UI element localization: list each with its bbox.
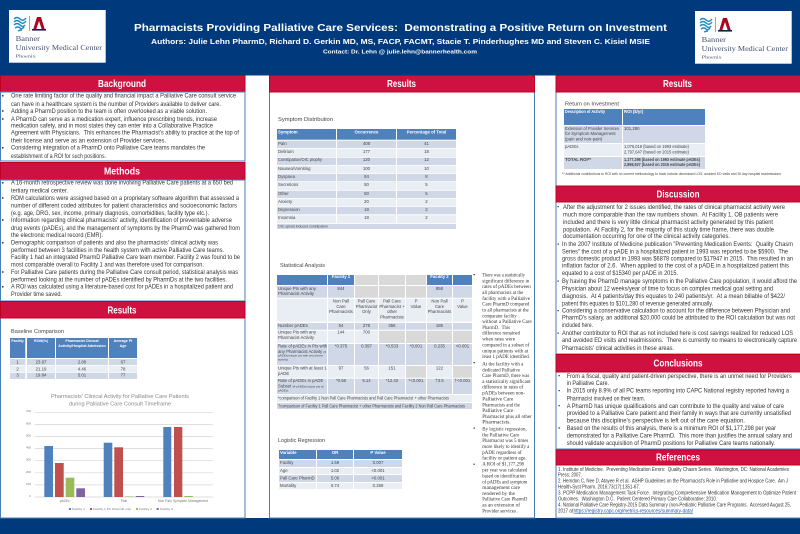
table: statistical analysis: 151 xyxy=(388,366,396,370)
text block: statistical findings: facility with a Palliative xyxy=(482,295,531,302)
logo: Banner University Medical Center right: Banner xyxy=(702,36,727,44)
text block: statistical findings: PharmD. This xyxy=(482,325,510,331)
panel: references xyxy=(556,450,800,518)
table: logistic regression: Mortality xyxy=(280,483,297,488)
panel: methods: Methods xyxy=(104,166,140,178)
panel: background: can have in a healthcare system is the number of Providers available to deliver care. xyxy=(11,102,221,108)
table: return on investment: 1,177,298 (based on 1993 estimate pADEs) xyxy=(624,157,700,162)
panel: discussion: much more comparable than the raw numbers shown. At Facility 1, OB patients were xyxy=(563,212,779,218)
table: logistic regression: P Value xyxy=(370,450,386,455)
table: baseline comparison: 4.46 xyxy=(78,366,87,371)
table: symptom distribution: Secretions xyxy=(278,182,298,187)
table: statistical analysis: activity) xyxy=(278,358,288,362)
table: return on investment: 2,797,647 (based on 2015 estimate) xyxy=(624,149,690,154)
table: logistic regression: Variable xyxy=(280,450,297,455)
table: symptom distribution: 50 xyxy=(364,191,369,196)
table: symptom distribution: 5 xyxy=(425,182,428,187)
panel: discussion: After the adjustment for 2 issues identified, the rates of clinical pharmacist activity were xyxy=(563,205,786,211)
panel: references: References xyxy=(656,452,700,464)
bar chart: pharmacists' clinical activity: Non Pain Symptom Management xyxy=(158,499,208,503)
table: statistical analysis: Value xyxy=(457,304,468,309)
table: return on investment: Description of Activity xyxy=(565,109,606,114)
table: symptom distribution: 408 xyxy=(363,141,371,146)
table: symptom distribution: Delirium xyxy=(278,149,294,154)
table: symptom distribution: 18 xyxy=(424,149,429,154)
table: statistical analysis: †comparison of Facility 1 Pall Care Pharmacist + other Pharmacists and Facility 2 Non Pall Care Pharmacists xyxy=(278,404,465,408)
table: statistical analysis: 0.235 xyxy=(434,344,445,348)
panel: results left: Results xyxy=(108,306,137,316)
text block: statistical findings: of pADEs and symptom xyxy=(482,478,528,485)
bar chart: pharmacists' clinical activity: Facility 1 PC PharmD only xyxy=(93,507,132,511)
table: return on investment: pADEs xyxy=(565,144,578,149)
panel: methods: (e.g. age, DRG, sex, income, primary diagnosis, comorbidities, facility type etc.). xyxy=(11,211,209,217)
panel: conclusions: demonstrated for a Palliative Care PharmD. This more than justifies the annual salary and xyxy=(567,433,792,439)
text block: statistical findings: dedicated Palliative xyxy=(482,367,521,373)
table: baseline comparison: 21.19 xyxy=(36,366,47,371)
text block: statistical findings: rendered by the xyxy=(482,491,516,497)
table: baseline comparison xyxy=(10,338,137,379)
table: statistical analysis: P xyxy=(461,298,464,304)
table: statistical analysis: Pharmacist Activity xyxy=(278,335,315,340)
table: statistical analysis: *<0.001 xyxy=(409,378,424,383)
table: statistical analysis: any Pharmacist Activity (# xyxy=(278,349,326,354)
panel: references: 2017 at xyxy=(558,508,574,514)
table: statistical analysis: Care xyxy=(435,304,445,309)
table: return on investment: (pain and non-pain) xyxy=(565,136,603,142)
text block: statistical findings: Pharmacist plus all other xyxy=(482,414,532,420)
table: statistical analysis: Pharmacist Activity xyxy=(278,291,315,296)
table: statistical analysis: Pharmacist xyxy=(356,304,378,309)
table: statistical analysis: *0.56 xyxy=(336,378,347,383)
panel: background: Considering integration of a PharmD onto Palliative Care teams mandates the xyxy=(11,146,206,152)
text block: statistical findings: facility or patient age. xyxy=(482,455,527,462)
table: statistical analysis: *0.533 xyxy=(386,344,399,348)
panel: conclusions: From a fiscal, quality and patient-driven perspective, there is an unmet need for Providers xyxy=(567,374,792,380)
bar chart: pharmacists' clinical activity: 500 xyxy=(26,434,31,438)
table: return on investment: ROI ($/yr) xyxy=(624,109,644,114)
panel: conclusions: because this discipline's perspective is left out of the care equation. xyxy=(567,418,745,424)
table: statistical analysis: 858 xyxy=(436,286,444,291)
logo: Banner University Medical Center right xyxy=(695,11,792,64)
logo: Banner University Medical Center left: Phoenix xyxy=(16,54,37,58)
table: baseline comparison: ROM(%) xyxy=(34,339,49,343)
bar chart: pharmacists' clinical activity: 400 xyxy=(26,446,31,450)
table: statistical analysis: Pharmacist + xyxy=(379,304,405,309)
text block: statistical findings: At the facility with a xyxy=(482,360,524,367)
table: return on investment: for Symptom Management xyxy=(565,131,616,136)
panel: background: medication safety, and in most states they can enter into a Collaborative Practice xyxy=(11,124,214,130)
panel: background: Agreement with Physicians. This enhances the Pharmacist's ability to practice at the top of xyxy=(11,131,239,137)
panel: conclusions: should validate acquisition of PharmD positions for Palliative Care teams nationally. xyxy=(567,441,775,447)
panel: methods: Demographic comparison of patients and also the pharmacists' clinical activity was xyxy=(11,241,218,247)
panel: discussion: population. At Facility 2, for the majority of this study time frame, there was double xyxy=(563,227,775,233)
panel: references: Press; 2007. xyxy=(558,473,582,479)
text block: statistical findings: There was a statistically xyxy=(482,273,525,279)
panel: background: One rate limiting factor of the quality and financial impact a Palliative Care consult service xyxy=(11,94,237,100)
table: logistic regression: 1.59 xyxy=(331,460,340,465)
text block: statistical findings: comparator facility xyxy=(482,312,517,319)
panel: discussion: patient this equates to $101,280 of revenue generated annually. xyxy=(562,301,713,307)
panel: references: Health-Syst Pharm. 2016;73(17):1351-67. xyxy=(558,485,640,491)
table: logistic regression: OR xyxy=(332,450,339,455)
table: baseline comparison: 5.01 xyxy=(78,372,87,378)
table: symptom distribution: Depression xyxy=(278,207,300,212)
panel: conclusions: In 2015 only 8.9% of all PC teams reporting into CAPC National registry reported having a xyxy=(567,389,790,395)
panel: results center: Results xyxy=(387,79,416,90)
table: symptom distribution: Anxiety xyxy=(278,199,293,204)
panel: discussion xyxy=(556,186,800,354)
table: baseline comparison: 2.88 xyxy=(78,359,87,364)
bar chart: pharmacists' clinical activity xyxy=(26,394,213,511)
logo: Banner University Medical Center right: University Medical Center xyxy=(702,45,789,53)
text block: statistical findings: when rates were xyxy=(482,337,516,343)
text block: statistical findings: Provider services . xyxy=(482,509,518,515)
table: return on investment: 2,898,927 (based on 2015 estimate pADEs) xyxy=(624,162,700,167)
table: statistical analysis: Facility 1 xyxy=(332,274,351,279)
table: statistical analysis: Pall Care xyxy=(383,298,401,304)
panel: methods: Facility 1 had an integrated PharmD Palliative Care team member. Facility 2 was found to be xyxy=(11,255,241,261)
panel: discussion: Considering a conservative calculation to account for the difference between Physician and xyxy=(562,309,790,315)
text block: statistical findings: significant difference in xyxy=(482,277,530,284)
table: statistical analysis: Subset (# pADEs/unique pts w/ xyxy=(278,384,324,388)
table: statistical analysis: Facility 2 xyxy=(430,274,449,279)
text block: statistical findings: Palliative Care PharmD xyxy=(482,497,527,503)
panel: discussion: documentation occurring for one of the clinical activity categories. xyxy=(563,234,730,240)
panel: methods: performed between 3 facilities in the health system with active Palliative Care teams. xyxy=(11,248,224,254)
table: statistical analysis: Care xyxy=(336,304,346,309)
heading: baseline comparison: Baseline Comparison xyxy=(11,329,64,335)
table: symptom distribution: Constipation/OIC prophy xyxy=(278,157,323,162)
table: symptom distribution: OIC opioid induced constipation xyxy=(278,224,328,228)
text block: statistical findings: unique patients with at xyxy=(482,348,529,354)
logo: Banner University Medical Center left: Banner xyxy=(16,35,41,43)
table: logistic regression: <0.001 xyxy=(371,476,385,480)
heading: symptom distribution: Symptom Distribution xyxy=(278,117,333,123)
table: statistical analysis: *12.42 xyxy=(386,378,399,383)
table: symptom distribution: Dyspnea xyxy=(278,174,296,179)
panel: conclusions xyxy=(556,354,800,449)
table: symptom distribution xyxy=(277,129,456,229)
table: logistic regression: Facility xyxy=(280,460,294,465)
table: statistical analysis: pADE xyxy=(278,371,289,376)
table: statistical analysis: other xyxy=(387,309,397,314)
panel: conclusions: Conclusions xyxy=(654,358,703,370)
footer band xyxy=(0,518,800,534)
table: statistical analysis: 122 xyxy=(436,366,444,370)
panel: discussion: Series" the cost of a pADE in a hospitalized patient in 1993 was reported to be $5900. The xyxy=(562,249,789,255)
panel: results right xyxy=(556,76,800,186)
panel: methods: drug events (pADEs), and the management of symptoms by the PharmD was gathered from xyxy=(11,226,240,232)
panel: methods: tertiary medical center. xyxy=(11,189,68,195)
text block: statistical findings: A ROI of $1,177,298 xyxy=(482,461,524,468)
table: logistic regression: Age xyxy=(280,468,288,473)
table: baseline comparison: Activity/Hospital Admission xyxy=(58,344,106,348)
text block: statistical findings: more likely to identify a xyxy=(482,443,530,450)
panel: discussion: Physician about 12 weeks/year of time to focus on complex medical goal setting and xyxy=(562,286,773,292)
heading: return on investment: Return on Investment xyxy=(565,101,619,107)
table: statistical analysis: pADEs/unique pts with any pharm xyxy=(278,354,324,358)
table: baseline comparison: 2 xyxy=(16,366,19,371)
table: symptom distribution: 120 xyxy=(363,157,371,162)
table: statistical analysis: 144 xyxy=(337,330,345,334)
table: statistical analysis: Unique Pts with any xyxy=(278,286,317,291)
panel: conclusions: provided to a Palliative Care patient and their family in ways that are currently unsatisfied xyxy=(567,411,791,417)
table: symptom distribution: 2 xyxy=(425,215,428,220)
table: statistical analysis: *0.001 xyxy=(410,344,423,348)
bar chart: pharmacists' clinical activity: Facility 2 xyxy=(139,507,152,511)
panel: methods: performed looking at the number of pADEs identified by PharmDs at the two facilities. xyxy=(11,278,227,284)
table: statistical analysis: Only xyxy=(362,309,372,314)
footnote: additional ROI contributions: ** Additional contributions to ROI with no current methodology to track include decreased LOS, avoided ED visits and 30 day hospital readmissions xyxy=(562,172,781,176)
panel: discussion: included here. xyxy=(562,323,593,329)
table: statistical analysis: 97 xyxy=(339,366,344,370)
table: statistical analysis: 186 xyxy=(436,323,444,328)
text block: statistical findings: to all pharmacists at the xyxy=(482,307,529,313)
table: statistical analysis: 844 xyxy=(337,286,345,291)
text block: statistical findings: rates of pADEs between xyxy=(482,283,531,290)
table: statistical analysis: *0.375 xyxy=(335,344,348,348)
table: symptom distribution: 84 xyxy=(364,174,369,179)
panel: discussion: inflation factor of 2.6. When applied to the cost of a pADE in a hospitalized patient this xyxy=(562,264,789,270)
table: return on investment: 101,280 xyxy=(624,126,640,131)
bar chart: pharmacists' clinical activity: Pharmacists' Clinical Activity for Palliative Care Patients xyxy=(51,394,190,400)
table: logistic regression: 5.06 xyxy=(331,476,340,480)
panel: methods: A 16-month retrospective review was done involving Palliative Care patients at a 650 bed xyxy=(11,181,233,187)
table: statistical analysis: Rate of pADEs in pADE xyxy=(278,378,324,383)
text block: statistical findings: pADE regardless of xyxy=(482,449,522,456)
panel: discussion: Pharmacists' clinical activities in these areas. xyxy=(562,346,674,352)
panel: conclusions: in Palliative Care. xyxy=(567,381,609,387)
table: statistical analysis: pADEs) xyxy=(278,388,288,392)
text block: statistical findings: all pharmacists at the xyxy=(482,290,524,296)
text block: statistical findings: Care PharmD, there was xyxy=(482,373,529,379)
bar chart: pharmacists' clinical activity: 300 xyxy=(26,458,31,462)
title: Pharmacists Providing Palliative Care Services: Demonstrating a Positive Return on Investment xyxy=(134,22,668,34)
heading: logistic regression: Logistic Regression xyxy=(278,438,325,444)
table: return on investment xyxy=(564,109,705,169)
table: symptom distribution: Occurrence xyxy=(355,130,379,134)
panel: methods: Information regarding clinical pharmacists' activity, identification of preventable adverse xyxy=(11,218,233,224)
table: statistical analysis: Pall Care xyxy=(358,298,376,304)
table: statistical analysis: 54 xyxy=(339,323,344,328)
table: statistical analysis: <0.001 xyxy=(456,344,470,348)
text block: statistical findings: per year was calculated xyxy=(482,468,528,474)
panel: background: establishment of a ROI for such positions. xyxy=(11,154,106,160)
text block: statistical findings: management care xyxy=(482,485,521,491)
text block: statistical findings: based on identification xyxy=(482,472,526,479)
bar chart: pharmacists' clinical activity: 0 xyxy=(29,494,31,498)
panel: discussion: In the 2007 Institute of Medicine publication "Preventing Medication Events: Quality Chasm xyxy=(562,242,793,248)
table: symptom distribution: 177 xyxy=(363,149,371,154)
table: baseline comparison: 78 xyxy=(121,366,126,371)
table: symptom distribution: 2 xyxy=(425,199,428,204)
contact: Contact: Dr. Lehn @ julie.lehn@bannerhealth.com xyxy=(323,50,477,56)
panel: conclusions: Pharmacist involved on their team. xyxy=(567,396,645,402)
logo: Banner University Medical Center left: University Medical Center xyxy=(16,44,103,52)
panel: discussion: Discussion xyxy=(656,190,700,200)
panel: background: their license and serve as an extension of Provider services. xyxy=(11,139,166,145)
table: symptom distribution: 41 xyxy=(424,141,429,146)
table: statistical analysis: †<0.001 xyxy=(455,378,471,383)
table: statistical analysis: Unique Pts with at least 1 xyxy=(278,366,327,370)
table: statistical analysis: 278 xyxy=(363,323,371,328)
table: logistic regression: <0.001 xyxy=(371,468,385,473)
table: baseline comparison: 19.84 xyxy=(36,372,47,378)
panel: references: https://registry.capc.org/metrics-resources/summary-data/ xyxy=(574,508,694,514)
table: logistic regression: 0.74 xyxy=(331,483,340,488)
bar chart: pharmacists' clinical activity: Facility 1 xyxy=(72,507,85,511)
text block: statistical findings: difference in rates of xyxy=(482,384,523,391)
panel: discussion: equated to a cost of $15340 per pADE in 2015. xyxy=(562,271,678,277)
bar chart: pharmacists' clinical activity: 100 xyxy=(26,482,31,486)
bar chart: pharmacists' clinical activity: during Palliative Care Consult Timeframe xyxy=(69,401,171,407)
table: statistical analysis: Pharmacists xyxy=(428,309,451,314)
panel: references: Outcomes. Washington D.C. Patient Centered Primary Care Collaborative; 2010. xyxy=(558,496,717,502)
table: symptom distribution: 5 xyxy=(425,191,428,196)
table: statistical analysis: *comparison of Facility 1 Non Pall Care Pharmacists and Pall Care Pharmacist + other Pharmacists xyxy=(278,396,449,401)
table: symptom distribution: Symptom xyxy=(278,130,298,134)
table: baseline comparison: 23.97 xyxy=(36,359,47,364)
table: statistical analysis: †3.5 xyxy=(435,378,444,383)
table: statistical analysis: 0.397 xyxy=(361,344,372,348)
text block: statistical findings xyxy=(474,273,532,515)
text block: statistical findings: Pharmacists and the xyxy=(482,402,521,408)
panel: methods: most comparable overall to Facility 1 and was therefore used for comparison. xyxy=(11,263,204,269)
table: logistic regression: Pall Care PharmD xyxy=(280,476,315,480)
table: symptom distribution: 18 xyxy=(364,215,369,220)
text block: statistical findings: compared in a subset of xyxy=(482,341,529,348)
text block: statistical findings: as an extension of xyxy=(482,502,520,509)
table: baseline comparison: Age xyxy=(120,344,126,348)
table: return on investment: Extension of Provider Services xyxy=(565,126,619,131)
bar chart: pharmacists' clinical activity: Pain xyxy=(121,499,127,503)
panel: conclusions: A PharmD has unique qualifications and can contribute to the quality and value of care xyxy=(567,404,785,410)
table: symptom distribution: Other xyxy=(278,191,289,196)
panel: methods xyxy=(0,162,245,301)
table: symptom distribution: 8 xyxy=(425,174,428,179)
text block: statistical findings: a statistically significant xyxy=(482,378,531,385)
panel: results right: Results xyxy=(663,79,692,90)
table: symptom distribution: 20 xyxy=(364,199,369,204)
table: statistical analysis: Non Pall xyxy=(333,298,349,304)
text block: statistical findings: Palliative Care xyxy=(482,396,514,402)
table: statistical analysis: 56 xyxy=(364,366,369,370)
table: symptom distribution: 18 xyxy=(364,207,369,212)
table: statistical analysis: Number pADEs xyxy=(278,323,308,328)
table: baseline comparison: 77 xyxy=(121,372,126,378)
panel: conclusions: Based on the results of this analysis, there is a minimum ROI of $1,177,298 per year xyxy=(567,426,776,432)
table: symptom distribution: Percentage of Total xyxy=(407,130,446,134)
table: logistic regression: 0.268 xyxy=(373,483,384,488)
table: statistical analysis: P xyxy=(415,298,418,304)
table: baseline comparison: 67 xyxy=(121,359,126,364)
text block: statistical findings: By logistic regression, xyxy=(482,426,527,432)
table: logistic regression: 1.02 xyxy=(331,468,340,473)
panel: background: Adding a PharmD position to the team is often overlooked as a viable solution. xyxy=(11,109,207,115)
bar chart: pharmacists' clinical activity: 600 xyxy=(26,421,31,425)
table: baseline comparison: 3 xyxy=(16,372,19,378)
table: statistical analysis: Pharmacists xyxy=(380,314,404,320)
table: statistical analysis: 356 xyxy=(388,323,396,328)
panel: results left xyxy=(0,302,245,518)
table: symptom distribution: Insomnia xyxy=(278,215,296,220)
table: symptom distribution: 50 xyxy=(364,182,369,187)
text block: statistical findings: pADEs between non- xyxy=(482,391,525,397)
logo: Banner University Medical Center right: Phoenix xyxy=(702,54,723,60)
text block: statistical findings: the Palliative Care xyxy=(482,432,520,438)
table: symptom distribution: 12 xyxy=(424,157,429,162)
panel: methods: Provider time saved. xyxy=(11,292,62,298)
text block: statistical findings: Pharmacist was 5 times xyxy=(482,438,528,444)
table: return on investment: 1,076,018 (based on 1993 estimate) xyxy=(624,144,690,149)
table: return on investment: TOTAL ROI** xyxy=(565,157,591,162)
table: baseline comparison: 1 xyxy=(16,359,19,364)
text block: statistical findings: least 1 pADE identified. xyxy=(482,353,530,360)
panel: discussion: diagnosis. At 4 patients/day this equates to 240 patients/yr. At a mean billable of $422/ xyxy=(562,294,785,300)
panel: discussion: included and there is very little clinical pharmacist activity generated by this patient xyxy=(563,220,773,226)
bar chart: pharmacists' clinical activity: 700 xyxy=(26,409,31,413)
table: statistical analysis: 700 xyxy=(363,330,371,334)
text block: statistical findings: without a Palliative Care xyxy=(482,319,532,325)
text block: statistical findings: difference remained xyxy=(482,330,520,337)
table: baseline comparison: Pharmacist Clinical xyxy=(65,339,99,343)
header band xyxy=(0,0,800,76)
logo: Banner University Medical Center left xyxy=(9,10,106,63)
table: baseline comparison: Facility xyxy=(11,339,24,343)
table: symptom distribution: Pain xyxy=(278,141,287,146)
panel: methods: the electronic medical record (EMR). xyxy=(11,233,103,239)
table: statistical analysis: Rate of pADEs in Pts with xyxy=(278,344,328,348)
table: statistical analysis: 5.14 xyxy=(362,378,371,383)
table: logistic regression: 0.007 xyxy=(373,460,384,465)
table: symptom distribution: 100 xyxy=(363,166,371,171)
panel: methods: For Palliative Care patients during the Palliative Care consult period, statistical analysis was xyxy=(11,270,238,276)
table: symptom distribution: 2 xyxy=(425,207,428,212)
panel: results center xyxy=(270,76,534,518)
table: baseline comparison: Average Pt xyxy=(114,339,133,343)
table: symptom distribution: 10 xyxy=(424,166,429,171)
heading: statistical analysis: Statistical Analysis xyxy=(280,263,325,269)
bar chart: pharmacists' clinical activity: pADEs xyxy=(60,499,70,503)
text block: statistical findings: Care PharmD compared xyxy=(482,302,530,308)
authors: Authors: Julie Lehn PharmD, Richard D. Gerkin MD, MS, FACP, FACMT, Stacie T. Pinderhughes MD and Steven C. Kisiel MSIE xyxy=(151,37,650,46)
bar chart: pharmacists' clinical activity: Facility 3 xyxy=(160,507,173,511)
table: statistical analysis xyxy=(277,274,472,409)
table: logistic regression xyxy=(279,450,402,489)
panel: background xyxy=(0,76,245,161)
table: statistical analysis: Value xyxy=(411,304,422,309)
panel: methods: A ROI was calculated using a literature-based cost for pADEs in a hospitalized patient and xyxy=(11,285,233,291)
table: statistical analysis: Non Pall xyxy=(431,298,448,304)
panel: methods: RDM calculations were assigned based on a proprietary software algorithm that assessed a xyxy=(11,196,240,202)
table: statistical analysis: Unique Pts with any xyxy=(278,330,317,334)
panel: methods: number of different coded attributes for patient characteristics and socioeconomic factors xyxy=(11,203,237,209)
text block: statistical findings: Palliative Care xyxy=(482,408,514,414)
table: statistical analysis: Pharmacists xyxy=(329,309,353,314)
bar chart: pharmacists' clinical activity: 200 xyxy=(26,470,31,474)
panel: background: A PharmD can serve as a medication expert, influence prescribing trends, increase xyxy=(11,117,218,123)
text block: statistical findings: Pharmacists. xyxy=(482,420,511,426)
table: symptom distribution: Nausea/Vomiting xyxy=(278,166,311,171)
panel: background: Background xyxy=(98,79,146,90)
